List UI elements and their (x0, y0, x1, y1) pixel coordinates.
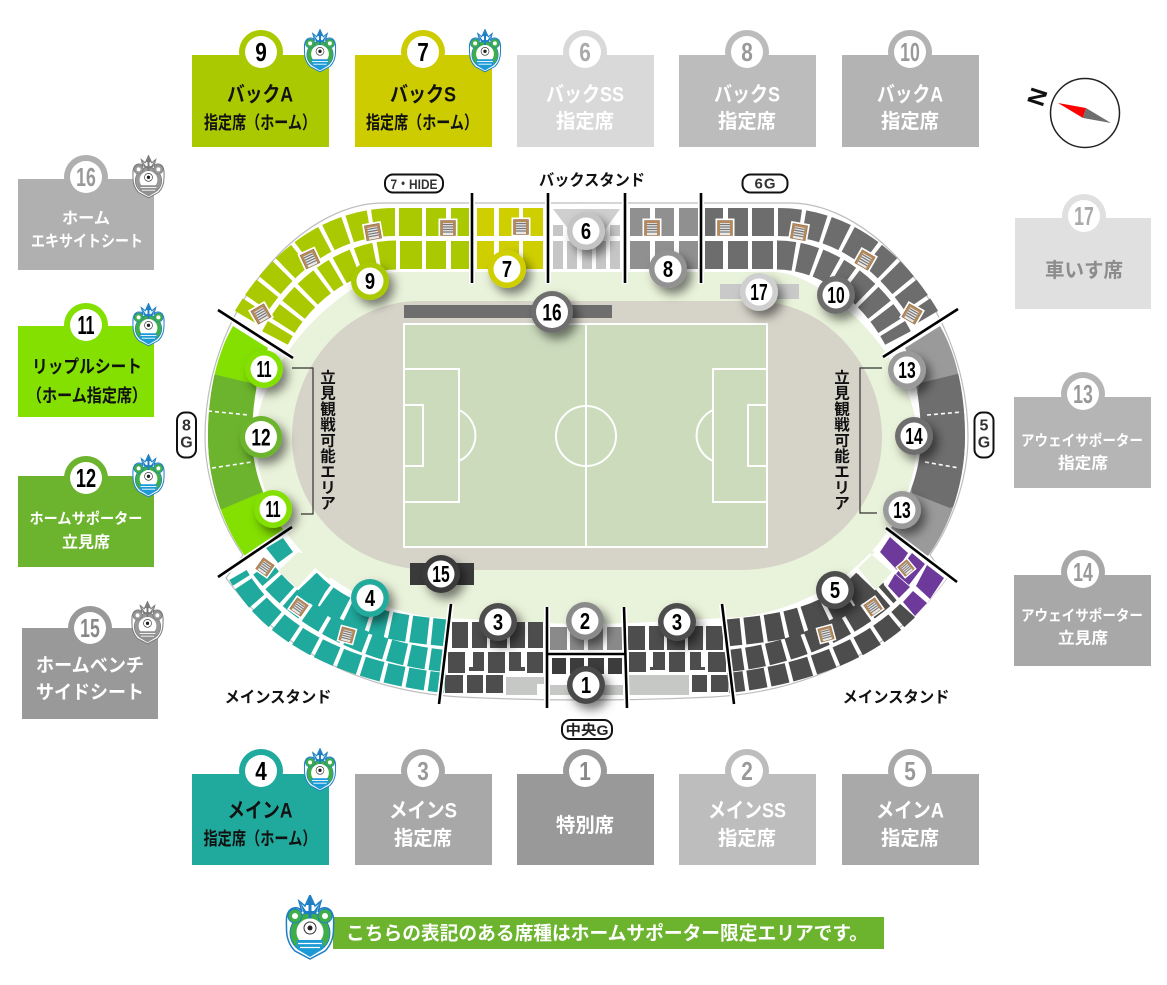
seats: main A section 5 (726, 535, 947, 683)
panel: 14 away supporter standing (1014, 550, 1151, 666)
gate tag: 5G: G (978, 434, 990, 452)
seats: main S section 3 right (628, 626, 728, 695)
pin 2 (566, 602, 604, 640)
panel: 6 back SS: バックSS (546, 84, 624, 106)
panel: 14 away supporter standing: 14 (1073, 558, 1093, 587)
gates (248, 218, 925, 645)
panel: 16 home excite seat (18, 155, 164, 270)
panel: 4 main A home (192, 749, 336, 865)
pin 11 lower: 11 (265, 498, 281, 523)
label: standing area left: 能 (320, 446, 336, 465)
panel: 15 home bench side seat (22, 602, 163, 719)
pin 6 (567, 212, 605, 250)
panel: 16 home excite seat: エキサイトシート (31, 232, 143, 250)
panel: 8 back S: 指定席 (718, 110, 776, 133)
panel: 10 back A: 指定席 (881, 110, 939, 133)
callout: home supporter notice (286, 895, 884, 959)
panel: 5 main A: 指定席 (881, 827, 939, 850)
pitch (404, 324, 767, 547)
pin 13 upper: 13 (898, 358, 916, 384)
panel: 5 main A: メインA (876, 800, 944, 822)
seats: special section 1 and main SS section 2 (550, 627, 623, 695)
panel: 7 back S home: バックS (390, 84, 456, 106)
panel: 13 away supporter reserved: アウェイサポーター (1021, 432, 1143, 450)
seats: back A section 9 (247, 208, 469, 338)
panel: 2 main SS: メインSS (708, 800, 786, 822)
pin 12 (240, 416, 282, 458)
pin 12: 12 (251, 425, 271, 451)
pin 13 upper (888, 351, 926, 389)
pin 13 lower (883, 491, 921, 529)
gate tag: 6G: 6G (754, 176, 776, 192)
label: main stand right: メインスタンド (842, 688, 950, 706)
panel: 10 back A (842, 30, 979, 147)
pin 3 right (658, 603, 696, 641)
panel: 8 back S: 8 (741, 38, 753, 67)
gate tag: 6G (742, 174, 788, 192)
panel: 12 home supporter standing: ホームサポーター (30, 510, 142, 528)
panel: stadium map (177, 172, 994, 739)
ground surround (292, 301, 882, 570)
icon: compass: N (1022, 85, 1054, 109)
label: standing area right: ア (834, 495, 850, 512)
pin 3 left (479, 603, 517, 641)
panel: 5 main A (842, 749, 979, 865)
panel: 9 back A home: 9 (255, 38, 267, 67)
panel: 3 main S: 指定席 (394, 827, 452, 850)
seats: back S section 7 (477, 208, 543, 269)
label: standing area left: リ (320, 479, 336, 496)
seats: back A section 10 (705, 208, 926, 338)
panel: 3 main S: メインS (389, 800, 457, 822)
pin 4 (351, 579, 389, 617)
stadium base (205, 203, 968, 700)
panel: 11 ripple seat (18, 303, 164, 417)
panel: 15 home bench side seat: 15 (80, 614, 100, 643)
panel: 8 back S: バックS (714, 84, 780, 106)
label: standing area right: リ (834, 479, 850, 496)
panel: 12 home supporter standing: 立見席 (62, 534, 110, 552)
pin 9: 9 (365, 269, 375, 295)
gate tag: centre G: 中央G (566, 722, 609, 738)
gate tag: 5G (974, 412, 994, 458)
panel: 5 main A: 5 (904, 757, 916, 786)
panel: 10 back A: バックA (877, 84, 943, 106)
label: standing area right: 立 (834, 368, 850, 386)
panel: 16 home excite seat: 16 (76, 163, 96, 192)
panel: 11 ripple seat: リップルシート (32, 357, 142, 377)
panel: 9 back A home: バックA (227, 84, 293, 106)
panel: 17 wheelchair seat: 車いす席 (1045, 259, 1123, 282)
panel: 3 main S: 3 (417, 757, 429, 786)
panel: 1 special seat: 1 (579, 757, 591, 786)
pin 11 lower (254, 490, 292, 528)
pin 2: 2 (580, 609, 590, 635)
seats: main S section 3 left (445, 622, 544, 695)
panel: 17 wheelchair seat (1015, 194, 1151, 309)
pin 11 upper (245, 350, 283, 388)
panel: 1 special seat: 特別席 (556, 814, 614, 837)
pin 16: 16 (542, 300, 562, 326)
panel: 12 home supporter standing: 12 (76, 464, 96, 493)
pin 16 (531, 291, 573, 333)
pin 8 (649, 250, 687, 288)
pin 3 right: 3 (672, 610, 682, 636)
pin 10: 10 (827, 283, 845, 309)
pin 4: 4 (365, 586, 375, 612)
pin 15 (422, 555, 460, 593)
panel: 12 home supporter standing (18, 455, 164, 567)
label: standing area left: 見 (320, 384, 336, 402)
label: standing area right: 戦 (834, 415, 850, 434)
pin 5: 5 (830, 578, 840, 604)
panel: 9 back A home: 指定席（ホーム） (204, 112, 316, 133)
panel: 6 back SS: 指定席 (556, 110, 614, 133)
panel: 16 home excite seat: ホーム (62, 210, 110, 228)
label: standing area left: 可 (320, 432, 336, 449)
pin 7 (488, 250, 526, 288)
panel: 4 main A home: 4 (255, 757, 267, 786)
panel: 6 back SS (517, 30, 654, 147)
panel: 7 back S home: 指定席（ホーム） (366, 112, 478, 133)
panel: 4 main A home: メインA (228, 800, 292, 822)
pin 14: 14 (905, 424, 923, 450)
panel: 13 away supporter reserved: 13 (1073, 380, 1093, 409)
panel: 2 main SS (679, 749, 816, 865)
panel: 14 away supporter standing: 立見席 (1058, 630, 1108, 648)
panel: 10 back A: 10 (900, 38, 920, 67)
gate tag: 7 HIDE: 7・HIDE (390, 176, 438, 192)
panel: 9 back A home (192, 30, 336, 147)
label: standing area left: 立 (320, 368, 336, 386)
label: standing area right: 可 (834, 432, 850, 449)
panel: 2 main SS: 2 (741, 757, 753, 786)
panel: 4 main A home: 指定席（ホーム） (204, 828, 316, 849)
pin 6: 6 (581, 219, 591, 245)
track ring (256, 272, 917, 624)
panel: 7 back S home (355, 30, 501, 147)
label: standing area right: 見 (834, 384, 850, 402)
callout: home supporter notice: こちらの表記のある席種はホームサポーター限定エリアです。 (346, 922, 868, 944)
standing area right: sections 13 and 14 (891, 326, 965, 556)
icon: compass (1022, 78, 1120, 148)
pin 1: 1 (581, 673, 591, 699)
pin 5 (816, 571, 854, 609)
panel: 15 home bench side seat: サイドシート (36, 682, 144, 704)
pin 10 (817, 276, 855, 314)
panel: 13 away supporter reserved (1014, 372, 1151, 488)
panel: 14 away supporter standing: アウェイサポーター (1021, 608, 1143, 624)
seats: back SS section 6 (553, 209, 620, 269)
seats: visitor section purple (880, 537, 944, 616)
seats: main A section 4 (238, 538, 447, 683)
panel: 3 main S (355, 749, 492, 865)
panel: 17 wheelchair seat: 17 (1074, 202, 1094, 231)
label: standing area left: ア (320, 495, 336, 512)
label: standing area left: 観 (320, 400, 336, 418)
label: standing area left: エ (320, 464, 336, 481)
label: standing area left: 戦 (320, 415, 336, 434)
pin 7: 7 (502, 257, 512, 283)
panel: 8 back S (679, 30, 816, 147)
gate tag: 8G (177, 412, 196, 458)
gate tag: 5G: 5 (980, 418, 989, 434)
gate tag: 8G: G (180, 434, 193, 452)
pin 3 left: 3 (493, 610, 503, 636)
standing-area brackets (292, 368, 882, 514)
label: main stand left: メインスタンド (224, 688, 332, 706)
pin 15: 15 (432, 562, 450, 588)
panel: 6 back SS: 6 (579, 38, 591, 67)
panel: 15 home bench side seat: ホームベンチ (36, 656, 144, 676)
panel: 11 ripple seat: （ホーム指定席） (27, 385, 147, 406)
pin 13 lower: 13 (893, 498, 911, 524)
pin 11 upper: 11 (256, 358, 272, 383)
pin 9 (351, 262, 389, 300)
gate tag: 8G: 8 (182, 418, 191, 434)
section divider lines (218, 193, 958, 708)
pin 17: 17 (750, 280, 768, 306)
gate tag: centre G (562, 720, 612, 739)
panel: 7 back S home: 7 (417, 38, 429, 67)
seats: back S section 8 (630, 208, 698, 269)
panel: 13 away supporter reserved: 指定席 (1058, 454, 1108, 472)
pin 17 (740, 273, 778, 311)
bench bars (404, 284, 799, 585)
pin 8: 8 (663, 257, 673, 283)
panel: 2 main SS: 指定席 (718, 827, 776, 850)
label: standing area right: 観 (834, 400, 850, 418)
label: back stand: バックスタンド (539, 172, 645, 190)
panel: 11 ripple seat: 11 (77, 310, 95, 340)
standing area left: sections 11 and 12 (208, 326, 284, 556)
label: standing area right: エ (834, 464, 850, 481)
pin 14 (895, 417, 933, 455)
label: standing area right: 能 (834, 446, 850, 465)
panel: 1 special seat (517, 749, 654, 865)
pin 1 (567, 666, 605, 704)
